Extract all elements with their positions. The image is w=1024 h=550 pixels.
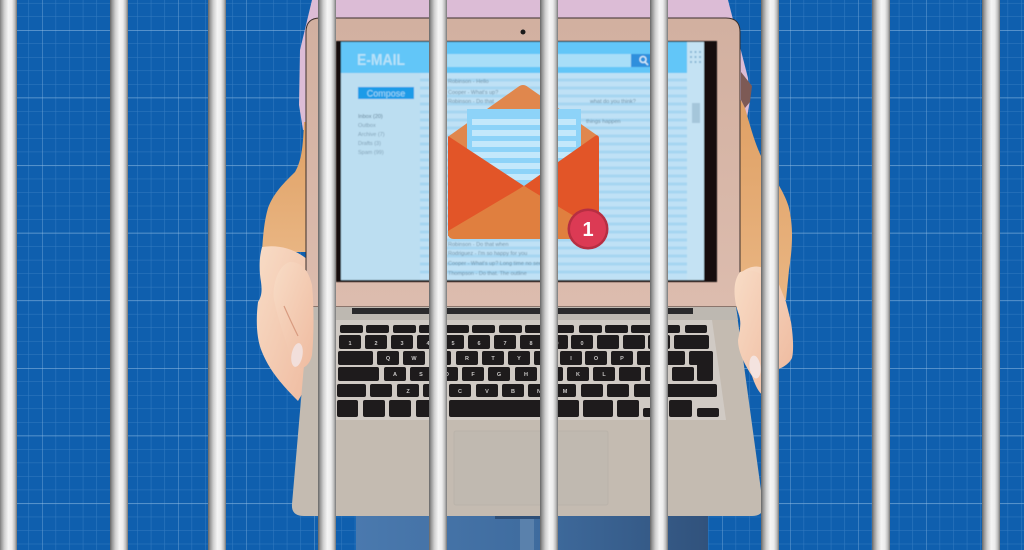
key labels: A [393,372,397,378]
webcam [520,30,526,34]
key labels: P [620,356,624,362]
person: elbow shadow [741,72,752,108]
key labels: J [550,372,554,378]
envelope icon [448,85,599,239]
right thumb [734,271,779,396]
search bar [447,54,631,67]
key labels: Z [406,389,410,395]
key labels: 4 [426,341,430,347]
person: shirt [299,0,750,130]
key labels: X [432,389,436,395]
key labels: T [491,356,495,362]
key labels: C [458,389,462,395]
key labels: 1 [348,341,352,347]
folder list: Drafts (3) [358,141,381,147]
key labels: D [445,372,449,378]
key labels: H [524,372,528,378]
email list rows: Cooper - What's up? [448,90,498,96]
email list rows: things happen [586,119,621,125]
key labels: 0 [580,341,584,347]
key labels: E [438,356,442,362]
key labels: S [419,372,423,378]
keyboard well [336,320,726,420]
email header [341,42,687,73]
key labels: 8 [529,341,533,347]
right hand: fingers behind laptop [740,267,793,372]
folder list: Spam (99) [358,150,384,156]
folder list [358,114,385,156]
email list rows [420,73,687,280]
key labels: 9 [555,341,559,347]
key labels: Y [517,356,521,362]
notification badge: 1 [582,219,594,241]
key labels: Q [386,356,391,362]
key labels: 2 [374,341,378,347]
key labels: 6 [477,341,481,347]
key labels: L [602,372,606,378]
key labels: B [511,389,515,395]
email list rows: Rodriguez - I'm so happy for you [448,251,527,257]
folder list: Outbox [358,123,376,129]
left hand: fingers behind laptop [257,246,310,401]
notification badge [568,208,608,250]
email list rows: what do you think? [589,99,636,105]
key labels [348,341,624,395]
scrollbar and menu [687,42,704,280]
envelope flaps [448,136,524,236]
email list rows: Robinson - Do that when [448,242,509,248]
key labels: F [471,372,475,378]
email list rows: Robinson - Hello [448,79,489,85]
key labels: N [537,389,541,395]
key labels: I [570,356,572,362]
logo: E-MAIL [357,52,405,69]
key labels: G [497,372,501,378]
laptop base [292,307,763,516]
folder list: Archive (7) [358,132,385,138]
laptop screen [336,41,717,282]
laptop lid [306,18,740,307]
person: left arm [262,122,320,252]
key labels: M [563,389,568,395]
right thumbnail [748,355,762,379]
compose button: Compose [367,88,405,98]
search button [631,54,653,67]
key labels: 5 [451,341,455,347]
keyboard keys [337,325,719,417]
key labels: U [543,356,547,362]
key labels: K [576,372,580,378]
key labels: 3 [400,341,404,347]
laptop [292,18,763,516]
key labels: V [485,389,489,395]
email list rows: Robinson - Do that [448,99,494,105]
hinge [352,308,693,314]
folder list: Inbox (20) [358,114,383,120]
compose button [358,87,414,99]
key labels: R [465,356,469,362]
left thumb [274,262,314,368]
email list rows: Thompson - Do that. The outline [448,271,527,277]
letter [467,109,581,189]
trackpad [454,431,608,505]
hinge area [307,307,738,320]
envelope pocket [448,186,599,239]
key labels: 7 [503,341,507,347]
email list rows: Cooper - What's up? Long time no see [448,261,542,267]
key labels: W [411,356,417,362]
key labels: O [594,356,599,362]
person: right arm [730,95,792,300]
person: jeans [356,514,708,550]
left thumbnail [289,342,305,368]
